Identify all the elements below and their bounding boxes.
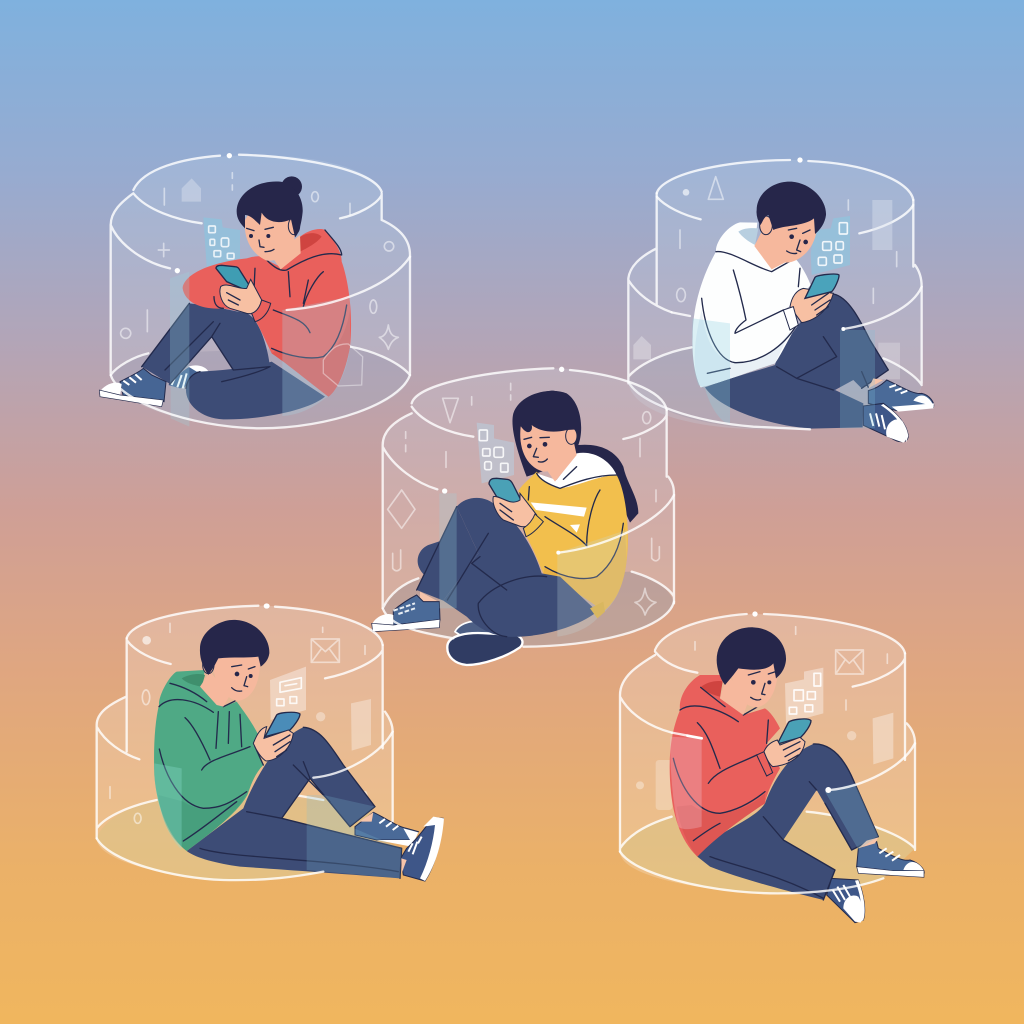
app panel: [270, 667, 306, 720]
head: [237, 176, 303, 269]
front shoe: [372, 592, 440, 632]
sweater: [518, 453, 628, 612]
legs: [417, 498, 597, 637]
glass cylinder back: [620, 611, 915, 893]
hoodie: [692, 222, 811, 387]
front shoe: [401, 817, 444, 881]
bottom shoe: [827, 878, 865, 923]
bottom shoe: [447, 621, 522, 665]
right shoe: [857, 837, 924, 877]
hoodie: [670, 675, 780, 857]
app panel: [477, 423, 514, 483]
figure: person in yellow sweater with long hair inside glass cylinder: [372, 367, 674, 665]
shoe: [868, 378, 934, 412]
legs: [697, 744, 878, 900]
hand and phone: [489, 478, 543, 537]
hand and phone: [253, 712, 300, 761]
glass overlay panels: [97, 732, 402, 880]
head: [717, 627, 786, 715]
app panel: [203, 217, 240, 267]
glass cylinder back: [97, 603, 393, 880]
figure: person in red hoodie with hair bun inside glass cylinder: [99, 153, 410, 428]
glass cylinder back: [111, 153, 410, 428]
hand and phone: [783, 274, 839, 330]
hem: [590, 602, 605, 618]
back hair: [512, 391, 638, 523]
hand and phone: [216, 265, 271, 322]
hoodie: [154, 670, 263, 851]
glass overlay panels: [383, 493, 674, 647]
figure: person in red hoodie inside glass cylinder, lower right: [620, 611, 924, 923]
back shoe: [168, 365, 208, 388]
shoe front: [863, 403, 908, 443]
glass overlay panels: [111, 257, 410, 428]
back shoe: [355, 812, 418, 847]
hoodie: [183, 229, 351, 397]
legs: [705, 294, 888, 429]
legs: [187, 727, 402, 878]
glass cylinder back: [383, 367, 674, 647]
glass overlay panels: [628, 287, 922, 429]
head: [514, 391, 578, 482]
legs: [142, 303, 325, 419]
figure: person in green hoodie inside glass cylinder: [97, 603, 444, 881]
glass overlay panels: [620, 733, 915, 893]
head: [200, 620, 269, 707]
figure: person in white hoodie inside glass cylinder: [628, 157, 934, 443]
app panel: [785, 668, 823, 723]
hand and phone: [764, 719, 811, 767]
head: [754, 182, 826, 269]
app panel: [811, 216, 850, 275]
glass cylinder back: [628, 157, 922, 429]
front shoe: [99, 368, 166, 407]
